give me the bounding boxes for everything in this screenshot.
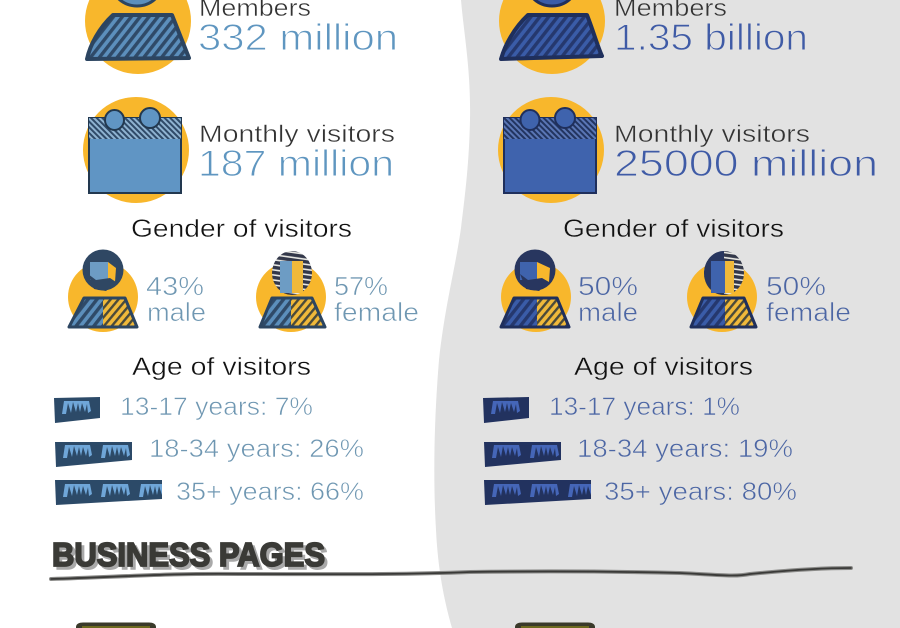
text: male share: 50% bbox=[578, 271, 638, 301]
bar: 18-34 years bbox=[484, 442, 561, 467]
heading: gender of visitors: Gender of visitors bbox=[563, 215, 784, 243]
heading: age of visitors: Age of visitors bbox=[574, 353, 753, 381]
bar: 35+ years bbox=[484, 480, 591, 505]
text: female label: female bbox=[766, 297, 851, 327]
heading: business pages: BUSINESS PAGES bbox=[52, 536, 325, 573]
heading: gender of visitors: Gender of visitors bbox=[131, 215, 352, 243]
text: male share: 43% bbox=[146, 271, 204, 301]
text: 13-17 years: 13-17 years: 7% bbox=[120, 393, 313, 421]
icon: female visitor bbox=[687, 251, 757, 332]
icon: members person bbox=[85, 0, 191, 74]
heading: business pages: BUSINESS PAGES bbox=[55, 539, 328, 576]
text: male label: male bbox=[578, 297, 638, 327]
icon: right business page top bbox=[515, 622, 595, 628]
icon: male visitor bbox=[68, 250, 138, 332]
text: 18-34 years: 18-34 years: 26% bbox=[149, 435, 364, 463]
text: 35+ years: 35+ years: 66% bbox=[176, 478, 364, 506]
bar: 13-17 years bbox=[483, 397, 529, 423]
text: female share: 50% bbox=[766, 271, 826, 301]
text: 13-17 years: 13-17 years: 1% bbox=[549, 393, 740, 421]
text: monthly visitors label: Monthly visitors bbox=[614, 121, 810, 148]
icon: members person bbox=[499, 0, 605, 74]
text: monthly visitors value: 25000 million bbox=[614, 143, 878, 184]
panel: left platform stats bbox=[54, 0, 419, 506]
text: 35+ years: 35+ years: 80% bbox=[604, 478, 797, 506]
text: male label: male bbox=[147, 297, 206, 327]
panel: right platform stats bbox=[483, 0, 878, 506]
heading: age of visitors: Age of visitors bbox=[132, 353, 311, 381]
bar: 18-34 years bbox=[55, 442, 132, 467]
background: grey panel with curved edge bbox=[434, 0, 900, 628]
icon: left business page top bbox=[76, 622, 156, 628]
icon: female visitor bbox=[256, 251, 326, 332]
text: female label: female bbox=[334, 297, 419, 327]
bar: 13-17 years bbox=[54, 397, 100, 423]
text: monthly visitors label: Monthly visitors bbox=[199, 121, 395, 148]
icon: monthly visitors calendar bbox=[83, 97, 189, 203]
bar: 35+ years bbox=[55, 480, 162, 505]
divider: hand-drawn rule bbox=[51, 568, 851, 579]
icon: monthly visitors calendar bbox=[498, 97, 604, 203]
text: members value: 1.35 billion bbox=[614, 17, 808, 58]
text: female share: 57% bbox=[334, 271, 388, 301]
text: monthly visitors value: 187 million bbox=[198, 143, 394, 184]
icon: male visitor bbox=[501, 250, 571, 332]
text: members value: 332 million bbox=[198, 17, 398, 58]
text: 18-34 years: 18-34 years: 19% bbox=[577, 435, 793, 463]
